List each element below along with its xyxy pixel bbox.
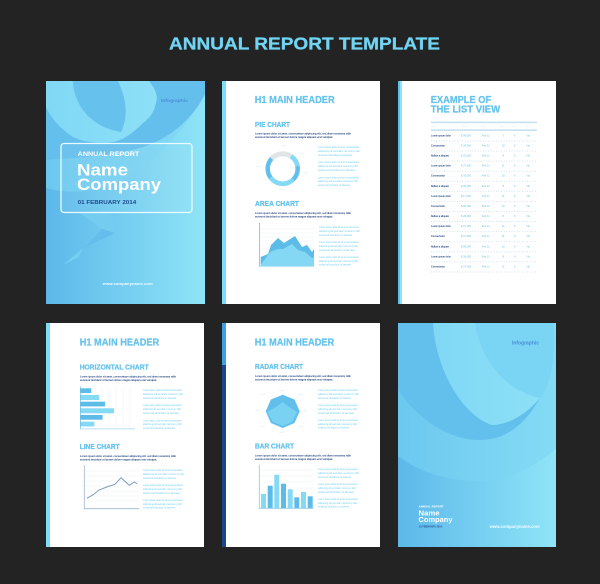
- table: Consectetur: [431, 204, 445, 208]
- area notes: adipiscing elit sed diam nonummy nibh: [319, 259, 358, 263]
- table: 11: [502, 234, 505, 238]
- date: 01 FEBRUARY 2014: [78, 200, 136, 206]
- table: 8: [503, 184, 505, 188]
- table: Feb 11: [482, 204, 490, 208]
- website: www.companyname.com: [102, 281, 153, 286]
- pie notes: adipiscing elit sed diam nonummy nibh: [318, 164, 358, 168]
- table: $ 27,000: [461, 164, 472, 168]
- pie intro: Lorem ipsum dolor sit amet, consectetuer adipiscing elit, sed diam nonummy nibh: [255, 132, 351, 136]
- callout box: [61, 144, 192, 212]
- horizontal chart notes: Lorem ipsum dolor sit amet consectetuer: [143, 403, 182, 407]
- pie notes: [318, 145, 360, 187]
- table: $ 22,000: [461, 154, 472, 158]
- area notes: Lorem ipsum dolor sit amet consectetuer: [319, 225, 359, 229]
- area notes: euismod tincidunt ut laoreet: [319, 262, 351, 266]
- table: 10: [502, 244, 505, 248]
- radar chart: Label: [255, 410, 260, 412]
- pie notes: euismod tincidunt ut laoreet: [318, 168, 355, 172]
- bar heading: BAR CHART: [255, 444, 295, 450]
- radar intro: Lorem ipsum dolor sit amet, consectetuer adipiscing elit, sed diam nonummy nibh: [255, 374, 351, 378]
- list heading: [431, 95, 501, 116]
- area intro: euismod tincidunt ut laoreet dolore magna aliquam erat volutpat.: [255, 214, 333, 218]
- table: 6: [514, 224, 516, 228]
- radar notes: euismod tincidunt ut laoreet: [318, 426, 349, 430]
- table: Feb 11: [482, 254, 490, 258]
- area notes: adipiscing elit sed diam nonummy nibh: [319, 229, 360, 233]
- header: H1 MAIN HEADER: [255, 95, 335, 106]
- website: www.companyname.com: [489, 524, 540, 529]
- area chart: [259, 223, 314, 267]
- line chart notes: adipiscing elit sed diam nonummy nibh: [143, 472, 184, 476]
- area notes: [319, 225, 360, 266]
- table: Lorem ipsum dolor: [431, 194, 451, 198]
- table: 6: [514, 264, 516, 268]
- radar chart: Label: [298, 394, 303, 396]
- table: [431, 122, 537, 272]
- area notes: euismod tincidunt ut laoreet: [319, 248, 355, 252]
- infographic tag: Infographic: [512, 341, 539, 347]
- table: No: [527, 134, 531, 138]
- table: $ 17,000: [461, 194, 472, 198]
- header: H1 MAIN HEADER: [80, 338, 160, 348]
- table: $ 33,000: [461, 174, 472, 178]
- table: No: [527, 184, 531, 188]
- pie heading: PIE CHART: [255, 122, 291, 129]
- pie notes: Lorem ipsum dolor sit amet consectetuer: [318, 160, 359, 164]
- radar notes: Lorem ipsum dolor sit amet consectetuer: [318, 418, 358, 422]
- horizontal bar chart: [80, 386, 135, 430]
- table: Lorem ipsum dolor: [431, 224, 451, 228]
- bar intro: Lorem ipsum dolor sit amet, consectetuer adipiscing elit, sed diam nonummy nibh: [255, 453, 351, 457]
- area heading: AREA CHART: [255, 201, 300, 208]
- area notes: Lorem ipsum dolor sit amet consectetuer: [319, 240, 359, 244]
- table: $ 27,000: [461, 264, 472, 268]
- table: 6: [514, 194, 516, 198]
- horizontal chart notes: euismod tincidunt ut laoreet: [143, 411, 179, 415]
- table: Feb 11: [482, 154, 490, 158]
- donut chart: Label: [299, 153, 304, 155]
- line chart notes: Lorem ipsum dolor sit amet consectetuer: [143, 498, 183, 502]
- table: No: [527, 204, 531, 208]
- table: Feb 11: [482, 194, 490, 198]
- table: $ 26,000: [461, 214, 472, 218]
- table: Feb 11: [482, 224, 490, 228]
- table: 7: [503, 134, 505, 138]
- table: 8: [503, 254, 505, 258]
- table: 11: [502, 194, 505, 198]
- table: Ref: [526, 126, 530, 128]
- horizontal chart notes: euismod tincidunt ut laoreet: [143, 396, 176, 400]
- pie notes: Lorem ipsum dolor sit amet consectetuer: [318, 176, 359, 180]
- table: No: [527, 194, 531, 198]
- horizontal chart intro: euismod tincidunt ut laoreet dolore magna aliquam erat volutpat.: [80, 378, 157, 382]
- line chart notes: adipiscing elit sed diam nonummy nibh: [143, 502, 182, 506]
- radar chart: Label: [260, 426, 265, 428]
- radar chart: [255, 390, 307, 434]
- area notes: adipiscing elit sed diam nonummy nibh: [319, 244, 358, 248]
- bar notes: euismod tincidunt ut laoreet: [318, 504, 349, 508]
- panel: horizontal and line page: [46, 323, 204, 547]
- table: Lorem ipsum dolor: [431, 164, 451, 168]
- area notes: Lorem ipsum dolor sit amet consectetuer: [319, 255, 359, 259]
- horizontal chart notes: Lorem ipsum dolor sit amet consectetuer: [143, 418, 182, 422]
- table: No: [527, 234, 531, 238]
- bar notes: Lorem ipsum dolor sit amet consectetuer: [318, 482, 358, 486]
- donut chart: Label: [281, 145, 286, 147]
- table: No: [527, 264, 531, 268]
- table: $ 34,000: [461, 144, 472, 148]
- pie notes: Lorem ipsum dolor sit amet consectetuer: [318, 145, 359, 149]
- bar notes: adipiscing elit sed diam nonummy nibh: [318, 486, 356, 490]
- line chart notes: Lorem ipsum dolor sit amet consectetuer: [143, 483, 183, 487]
- donut chart: Label: [279, 189, 284, 191]
- table: $ 26,000: [461, 184, 472, 188]
- radar chart: Label: [298, 426, 303, 428]
- table: 6: [514, 134, 516, 138]
- radar notes: Lorem ipsum dolor sit amet consectetuer: [318, 388, 358, 392]
- table: No: [527, 174, 531, 178]
- panel: back cover: [398, 323, 556, 547]
- radar notes: euismod tincidunt ut laoreet: [318, 396, 351, 400]
- table: Feb 11: [482, 244, 490, 248]
- line chart notes: [143, 468, 184, 510]
- horizontal chart intro: [80, 374, 176, 382]
- table: $ 99,000: [461, 134, 472, 138]
- line chart notes: euismod tincidunt ut laoreet: [143, 506, 175, 510]
- title: ANNUAL REPORT TEMPLATE: [169, 34, 440, 54]
- radar chart: Label: [260, 394, 265, 396]
- pie notes: euismod tincidunt ut laoreet: [318, 153, 352, 157]
- table: 11: [502, 224, 505, 228]
- bar notes: [318, 467, 359, 508]
- table: 6: [514, 154, 516, 158]
- table: No: [527, 154, 531, 158]
- radar heading: RADAR CHART: [255, 364, 304, 371]
- table: 11: [502, 164, 505, 168]
- table: Consectetur: [431, 234, 445, 238]
- table: 10: [502, 144, 505, 148]
- radar notes: [318, 388, 359, 430]
- table: Amount: [462, 125, 469, 128]
- table: 6: [514, 174, 516, 178]
- line chart heading: LINE CHART: [80, 444, 120, 451]
- radar intro: euismod tincidunt ut laoreet dolore magna aliquam erat volutpat.: [255, 378, 333, 382]
- bar notes: Lorem ipsum dolor sit amet consectetuer: [318, 497, 358, 501]
- table: No: [527, 214, 531, 218]
- date: 01 FEBRUARY 2014: [419, 526, 443, 528]
- line chart notes: adipiscing elit sed diam nonummy nibh: [143, 487, 182, 491]
- company name: Name: [77, 162, 128, 180]
- table: 8: [503, 154, 505, 158]
- radar notes: adipiscing elit sed diam nonummy nibh: [318, 422, 357, 426]
- table: Qty: [500, 125, 503, 128]
- panel: front cover: [46, 81, 205, 304]
- bar notes: adipiscing elit sed diam nonummy nibh: [318, 471, 359, 475]
- table: Feb 11: [482, 234, 490, 238]
- radar notes: adipiscing elit sed diam nonummy nibh: [318, 392, 359, 396]
- line chart intro: euismod tincidunt ut laoreet dolore magna aliquam erat volutpat.: [80, 458, 157, 462]
- table: $ 27,000: [461, 234, 472, 238]
- table: No: [527, 244, 531, 248]
- table: Name: [431, 126, 437, 128]
- table: Count: [511, 125, 517, 128]
- table: 6: [514, 144, 516, 148]
- table: Nullam a aliquam: [431, 214, 450, 218]
- area intro: [255, 211, 351, 218]
- table: 6: [514, 164, 516, 168]
- line chart notes: euismod tincidunt ut laoreet: [143, 491, 180, 495]
- horizontal chart notes: adipiscing elit sed diam nonummy nibh: [143, 407, 181, 411]
- bar notes: adipiscing elit sed diam nonummy nibh: [318, 501, 357, 505]
- donut chart: [256, 145, 308, 191]
- ribbon graphic: [63, 213, 115, 265]
- bar intro: euismod tincidunt ut laoreet dolore magna aliquam erat volutpat.: [255, 457, 333, 461]
- table: Nullam a aliquam: [431, 154, 450, 158]
- table: Lorem ipsum dolor: [431, 254, 451, 258]
- table: Date: [481, 125, 486, 128]
- radar notes: euismod tincidunt ut laoreet: [318, 411, 354, 415]
- horizontal chart notes: adipiscing elit sed diam nonummy nibh: [143, 422, 182, 426]
- infographic tag: Infographic: [161, 98, 188, 104]
- line chart notes: euismod tincidunt ut laoreet: [143, 476, 176, 480]
- table: 6: [514, 204, 516, 208]
- table: Feb 11: [482, 164, 490, 168]
- company name line two: Company: [77, 176, 162, 194]
- bar notes: Lorem ipsum dolor sit amet consectetuer: [318, 467, 358, 471]
- line chart notes: Lorem ipsum dolor sit amet consectetuer: [143, 468, 183, 472]
- horizontal chart intro: Lorem ipsum dolor sit amet, consectetuer adipiscing elit, sed diam nonummy nibh: [80, 374, 176, 378]
- line chart intro: [80, 454, 176, 462]
- table: 6: [514, 184, 516, 188]
- donut chart: Label: [256, 166, 261, 168]
- table: 6: [514, 244, 516, 248]
- table: 6: [514, 214, 516, 218]
- table: $ 56,000: [461, 244, 472, 248]
- table: Consectetur: [431, 174, 445, 178]
- pie intro: [255, 132, 351, 139]
- horizontal chart notes: [143, 388, 183, 430]
- horizontal chart heading: HORIZONTAL CHART: [80, 364, 149, 372]
- bar notes: euismod tincidunt ut laoreet: [318, 490, 354, 494]
- list heading: THE LIST VIEW: [431, 104, 501, 116]
- radar chart: Label: [279, 390, 284, 392]
- table: 11: [502, 264, 505, 268]
- horizontal chart notes: euismod tincidunt ut laoreet: [143, 426, 175, 430]
- pie notes: adipiscing elit sed diam nonummy nibh: [318, 149, 360, 153]
- bar notes: euismod tincidunt ut laoreet: [318, 475, 351, 479]
- radar notes: Lorem ipsum dolor sit amet consectetuer: [318, 403, 358, 407]
- table: 6: [514, 234, 516, 238]
- header: H1 MAIN HEADER: [255, 338, 335, 348]
- pie notes: adipiscing elit sed diam nonummy nibh: [318, 179, 358, 183]
- table: $ 90,000: [461, 204, 472, 208]
- table: Feb 11: [482, 144, 490, 148]
- table: $ 27,000: [461, 224, 472, 228]
- table: Feb 11: [482, 134, 490, 138]
- table: No: [527, 224, 531, 228]
- panel: list view page: [398, 81, 556, 304]
- table: 6: [514, 254, 516, 258]
- donut chart: Label: [303, 172, 308, 174]
- bar intro: [255, 453, 351, 461]
- bar chart: [259, 465, 314, 508]
- table: 8: [503, 214, 505, 218]
- area intro: Lorem ipsum dolor sit amet, consectetuer adipiscing elit, sed diam nonummy nibh: [255, 211, 351, 215]
- table: $ 26,000: [461, 254, 472, 258]
- table: 10: [502, 204, 505, 208]
- horizontal chart notes: Lorem ipsum dolor sit amet consectetuer: [143, 388, 182, 392]
- horizontal chart notes: adipiscing elit sed diam nonummy nibh: [143, 392, 183, 396]
- table: No: [527, 144, 531, 148]
- panel: pie and area page: [222, 81, 380, 304]
- table: Nullam a aliquam: [431, 244, 450, 248]
- table: No: [527, 254, 531, 258]
- table: Lorem ipsum dolor: [431, 134, 451, 138]
- table: Consectetur: [431, 144, 445, 148]
- panel: radar and bar page: [222, 323, 380, 547]
- company name: Name: [418, 508, 440, 518]
- radar chart: Label: [279, 432, 284, 434]
- table: Feb 11: [482, 264, 490, 268]
- radar notes: adipiscing elit sed diam nonummy nibh: [318, 407, 357, 411]
- table: Nullam a aliquam: [431, 184, 450, 188]
- area notes: euismod tincidunt ut laoreet: [319, 233, 352, 237]
- table: Feb 11: [482, 174, 490, 178]
- back cover label: ANNUAL REPORT: [419, 504, 444, 508]
- table: Feb 11: [482, 214, 490, 218]
- list heading: EXAMPLE OF: [431, 95, 491, 106]
- table: Consectetur: [431, 264, 445, 268]
- radar chart: Label: [302, 410, 307, 412]
- pie intro: euismod tincidunt ut laoreet dolore magna aliquam erat volutpat.: [255, 135, 333, 139]
- line chart: [84, 465, 139, 509]
- table: 10: [502, 174, 505, 178]
- company name line two: Company: [418, 515, 453, 524]
- table: Feb 11: [482, 184, 490, 188]
- pie notes: euismod tincidunt ut laoreet: [318, 183, 350, 187]
- radar intro: [255, 374, 351, 382]
- cover label: ANNUAL REPORT: [78, 152, 140, 158]
- line chart intro: Lorem ipsum dolor sit amet, consectetuer adipiscing elit, sed diam nonummy nibh: [80, 454, 176, 458]
- table: No: [527, 164, 531, 168]
